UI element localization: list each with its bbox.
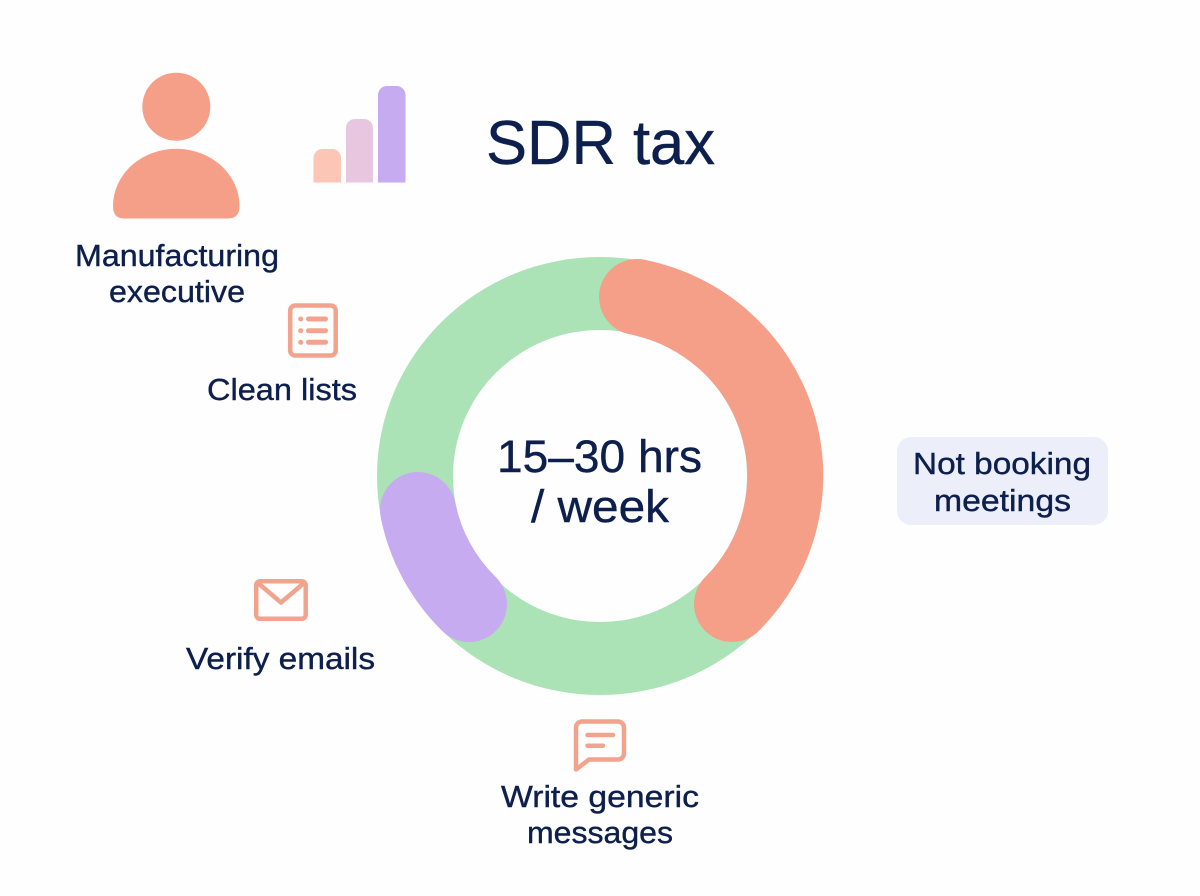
label: manufacturing executive — [75, 238, 279, 309]
ring: green base segment — [377, 257, 823, 695]
callout: not booking meetings: Not booking — [913, 446, 1091, 481]
label: verify emails: Verify emails — [186, 641, 375, 676]
donut center value: / week — [531, 481, 670, 532]
label: write generic messages — [501, 779, 699, 850]
donut chart — [377, 257, 823, 695]
title: SDR tax — [486, 109, 715, 178]
donut center value — [497, 431, 702, 532]
donut center value: 15–30 hrs — [497, 431, 702, 482]
icon: verify emails envelope — [256, 581, 306, 619]
callout: not booking meetings: meetings — [934, 483, 1071, 518]
label: write generic messages: Write generic — [501, 779, 699, 814]
callout: not booking meetings — [897, 437, 1108, 525]
segment: purple — [418, 510, 469, 604]
label: clean lists: Clean lists — [207, 372, 357, 407]
icon: rising bar chart — [314, 86, 406, 182]
icon: write generic messages speech bubble — [576, 722, 624, 770]
icon: clean lists checklist — [290, 306, 336, 356]
icon: manufacturing executive person — [113, 73, 240, 218]
segment: orange — [637, 297, 785, 604]
label: write generic messages: messages — [527, 815, 673, 850]
label: manufacturing executive: Manufacturing — [75, 238, 279, 273]
label: manufacturing executive: executive — [109, 274, 245, 309]
